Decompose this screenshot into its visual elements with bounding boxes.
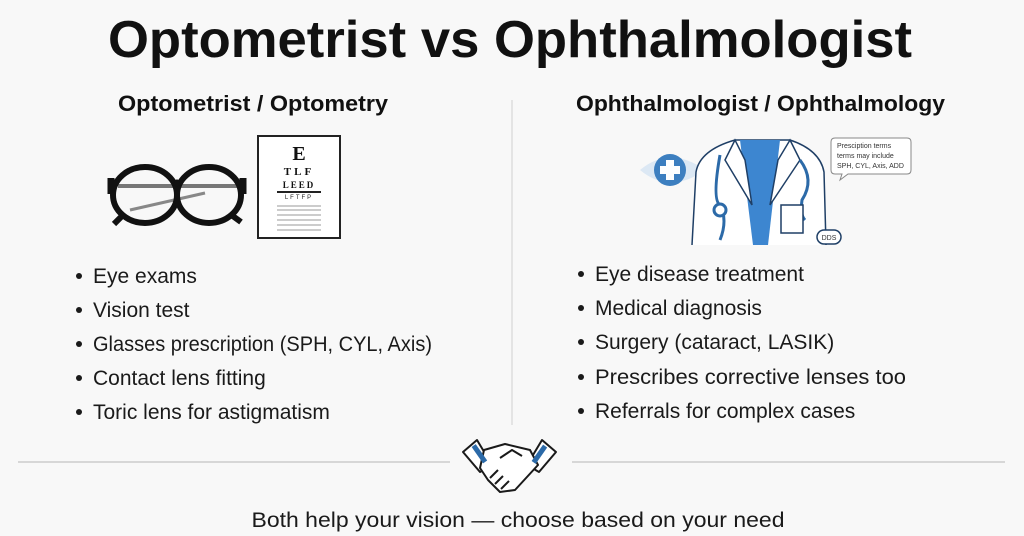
icon: handshake — [463, 440, 556, 492]
list: optometrist: Toric lens for astigmatism — [93, 401, 330, 424]
list: ophthalmologist — [578, 263, 906, 423]
panel: ophthalmologist — [576, 91, 946, 423]
icon: glasses — [111, 167, 243, 224]
list: ophthalmologist: Referrals for complex cases — [595, 400, 855, 423]
heading: ophthalmologist: Ophthalmologist / Ophthalmology — [576, 91, 946, 116]
list: optometrist: Contact lens fitting — [93, 367, 266, 390]
divider horizontal — [18, 461, 1005, 463]
callout: prescription terms: terms may include — [837, 153, 894, 160]
icon: eye chart: E — [292, 143, 306, 165]
list: ophthalmologist: Eye disease treatment — [595, 263, 804, 286]
list: ophthalmologist: Medical diagnosis — [595, 297, 762, 320]
divider vertical — [511, 100, 513, 425]
callout: prescription terms: Presciption terms — [837, 143, 892, 150]
callout: prescription terms: SPH, CYL, Axis, ADD — [837, 163, 904, 170]
icon: eye chart — [258, 136, 340, 238]
list: optometrist: Vision test — [93, 299, 190, 322]
footer text: Both help your vision — choose based on your need — [252, 509, 784, 532]
list: ophthalmologist: Prescribes corrective lenses too — [595, 366, 906, 389]
panel: ophthalmologist: DDS — [822, 235, 837, 242]
callout: prescription terms — [831, 138, 911, 180]
list: optometrist: Glasses prescription (SPH, CYL, Axis) — [93, 333, 432, 356]
icon: eye chart: LFTFP — [285, 195, 313, 201]
title: Optometrist vs Ophthalmologist — [108, 11, 912, 69]
icon: doctor coat — [692, 140, 841, 245]
icon: eye with cross — [640, 154, 705, 186]
icon: eye chart: LEED — [283, 180, 315, 190]
list: optometrist: Eye exams — [93, 265, 197, 288]
panel: optometrist — [76, 91, 432, 424]
icon: eye chart: TLF — [284, 166, 314, 178]
list: optometrist — [76, 265, 432, 424]
list: ophthalmologist: Surgery (cataract, LASIK) — [595, 331, 834, 354]
heading: optometrist: Optometrist / Optometry — [118, 91, 389, 116]
